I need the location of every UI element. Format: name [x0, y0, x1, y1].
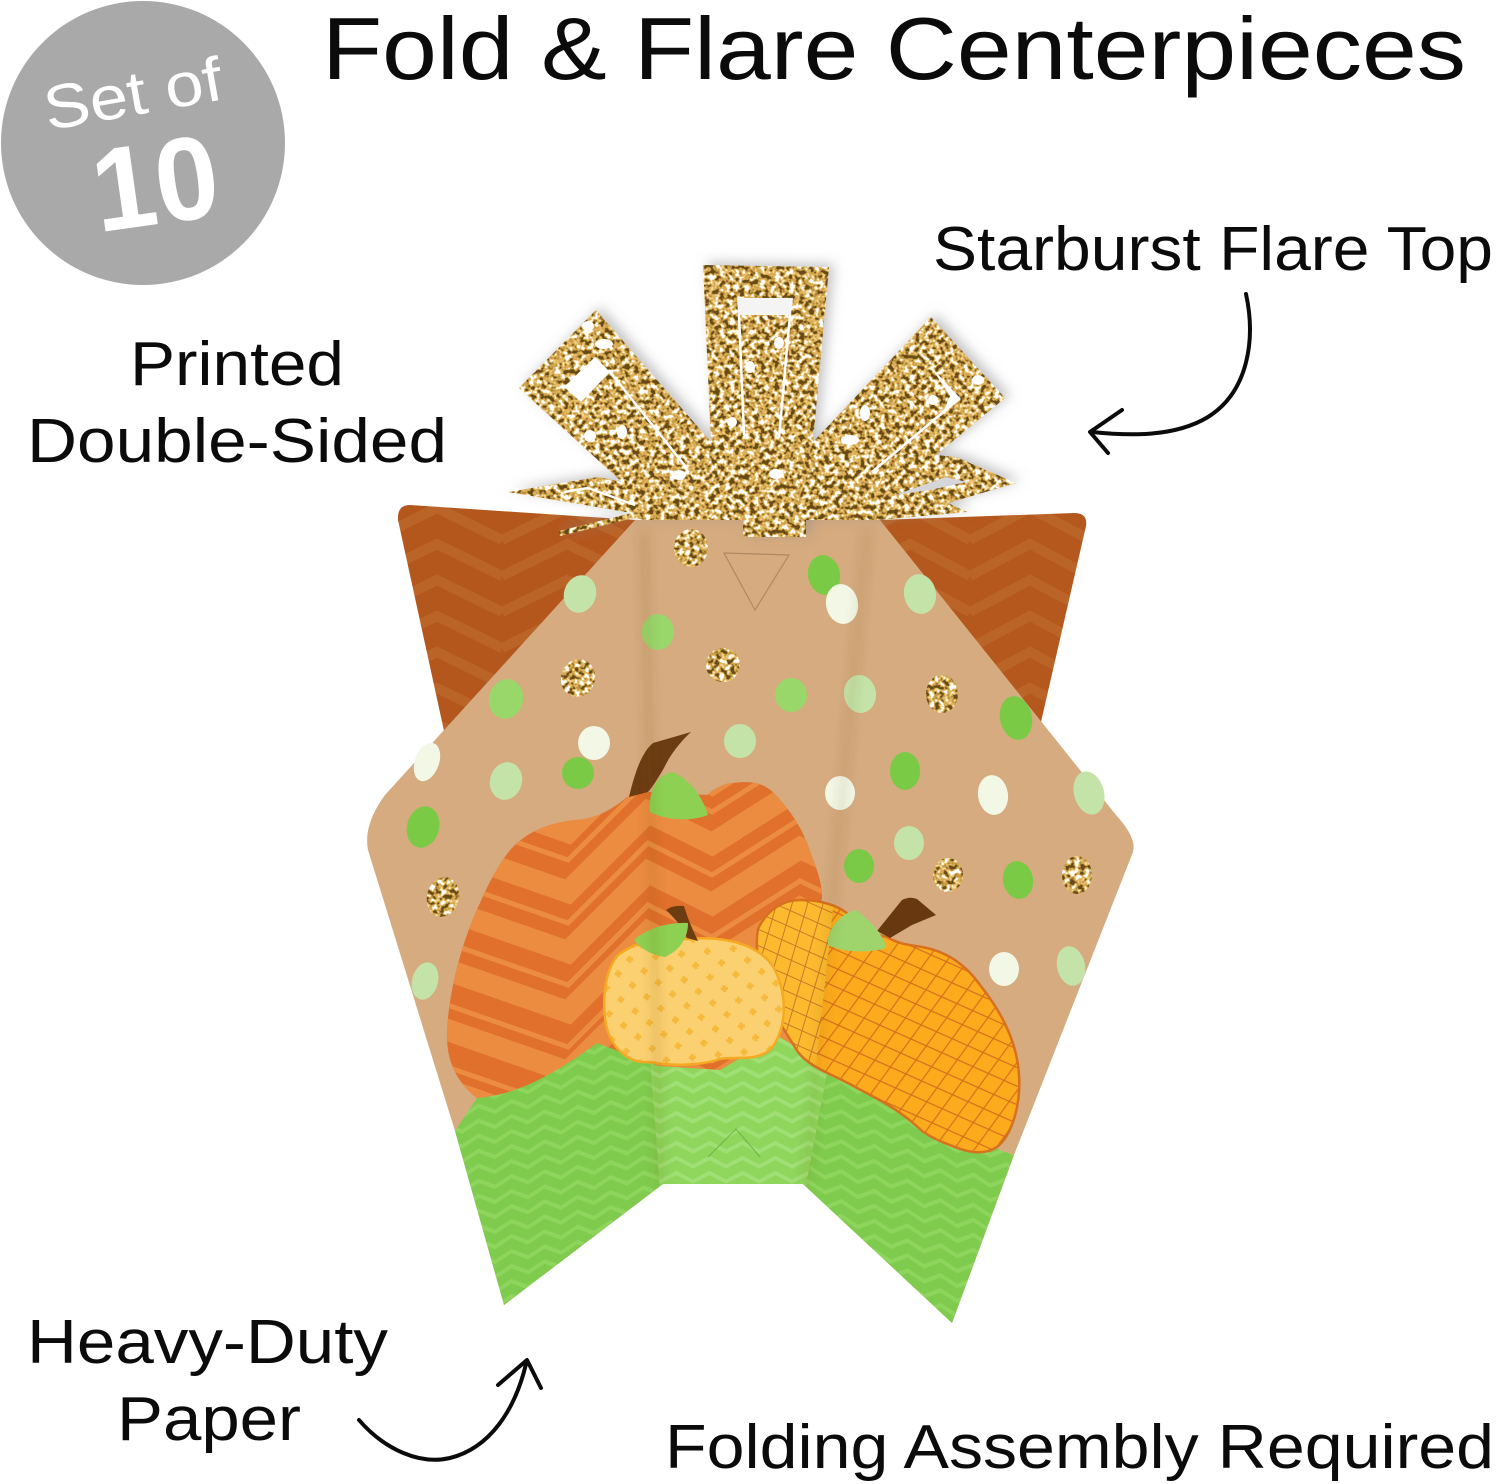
- centerpiece: [367, 265, 1134, 1330]
- label: folding assembly required: Folding Assembly Required: [665, 1413, 1494, 1482]
- badge: set of 10: [1, 1, 285, 285]
- cut guide: bottom triangle: [708, 1129, 760, 1157]
- back panel: left brown chevron: [398, 505, 636, 740]
- label: heavy-duty paper: Heavy-Duty: [27, 1308, 388, 1377]
- leaf: small pumpkin: [634, 923, 688, 957]
- leaf: right pumpkin: [828, 910, 886, 951]
- pumpkin: large chevron: [447, 782, 822, 1098]
- label: printed double-sided: [27, 330, 447, 476]
- dots: gold glitter: [422, 529, 1092, 920]
- stem: right pumpkin: [877, 898, 936, 938]
- stem: small pumpkin: [666, 906, 698, 941]
- front panel: kraft paper: [367, 520, 1134, 1323]
- gold glitter shape: [508, 265, 1016, 537]
- back panel: right brown chevron: [878, 513, 1086, 722]
- dots: green and white confetti: [402, 553, 1109, 1003]
- pumpkin: small dotted yellow: [604, 938, 784, 1065]
- slot cuts: [564, 298, 967, 505]
- label: printed double-sided: Double-Sided: [27, 407, 447, 476]
- arrow: to heavy-duty paper: [359, 1360, 541, 1460]
- starburst flare top: [508, 265, 1016, 537]
- label: starburst flare top: Starburst Flare Top: [933, 215, 1493, 284]
- arrow: to starburst top: [1090, 294, 1250, 453]
- fold lines: [644, 530, 867, 1184]
- title: Fold & Flare Centerpieces: [322, 0, 1466, 98]
- cut guide: top triangle: [724, 553, 789, 610]
- badge number: 10: 10: [84, 110, 227, 258]
- pumpkin: net pattern right: [756, 898, 1020, 1154]
- label: printed double-sided: Printed: [130, 330, 344, 399]
- grass: green chevron: [440, 1030, 1030, 1330]
- white glitter flecks: [582, 321, 984, 480]
- badge text: set of: Set of: [38, 45, 228, 144]
- leaf: large pumpkin: [650, 772, 708, 819]
- label: heavy-duty paper: Paper: [117, 1385, 301, 1454]
- stem: large pumpkin: [629, 732, 691, 797]
- label: heavy-duty paper: [27, 1308, 388, 1454]
